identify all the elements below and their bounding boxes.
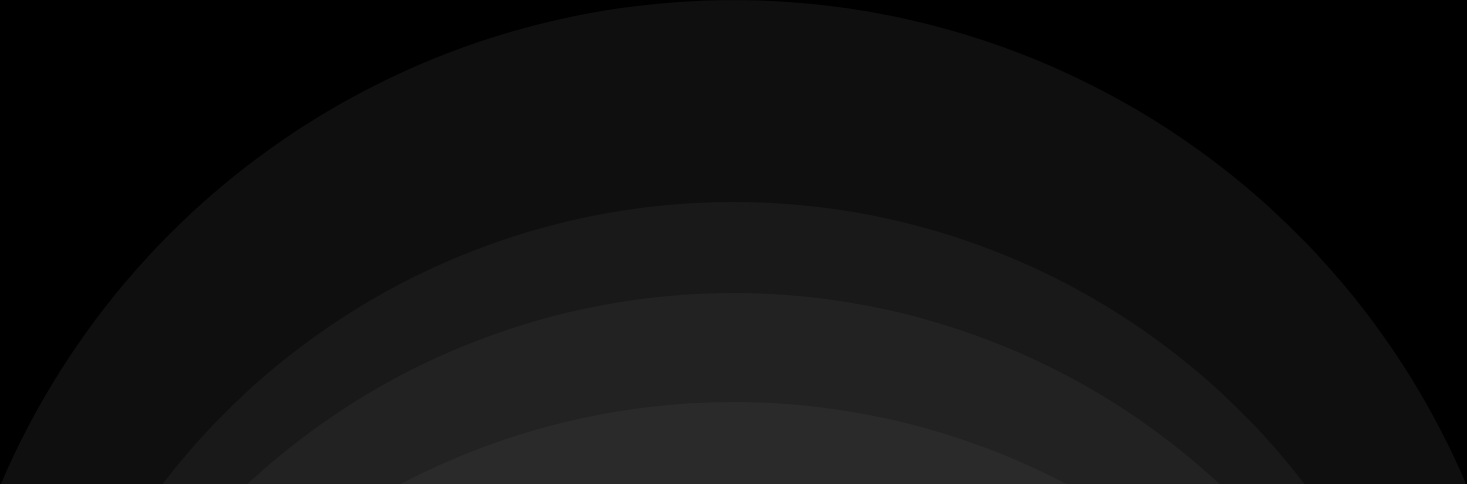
second arc xyxy=(162,202,1304,484)
inner arc xyxy=(400,402,1066,484)
third arc xyxy=(247,293,1220,484)
